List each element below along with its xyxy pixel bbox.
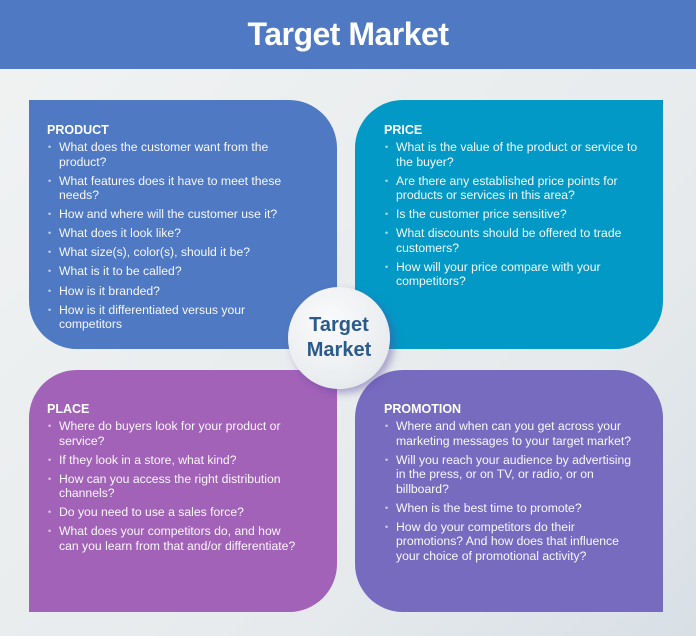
panel: product: What features does it have to meet these needs? — [59, 174, 281, 202]
panel: product: How is it differentiated versus your competitors — [59, 303, 245, 331]
panel: promotion: When is the best time to promote? — [396, 501, 582, 515]
panel: promotion: Where and when can you get across your marketing messages to your target market? — [396, 419, 631, 448]
panel: promotion — [355, 370, 663, 612]
center circle: Target — [309, 314, 369, 336]
panel: product: PRODUCT — [47, 123, 109, 137]
panel: place: Do you need to use a sales force? — [59, 505, 244, 519]
panel: price: Are there any established price points for products or services in this area? — [396, 174, 618, 202]
panel: price: What discounts should be offered to trade customers? — [396, 226, 621, 255]
panel: place: How can you access the right distribution channels? — [59, 472, 281, 500]
panel: product: What does it look like? — [59, 226, 181, 240]
panel: place: What does your competitors do, and how can you learn from that and/or differentiate? — [59, 524, 295, 553]
panel: promotion: Will you reach your audience by advertising in the press, or on TV, or radio, or on billboard? — [396, 453, 631, 496]
panel: product — [29, 100, 337, 349]
panel: place: PLACE — [47, 402, 89, 416]
center circle — [288, 287, 390, 389]
panel: product: What is it to be called? — [59, 264, 182, 278]
panel: place — [29, 370, 337, 612]
panel: product: What size(s), color(s), should it be? — [59, 245, 250, 259]
title: Target Market — [248, 16, 448, 52]
panel: price: What is the value of the product or service to the buyer? — [396, 140, 637, 168]
panel: product: How is it branded? — [59, 284, 160, 298]
panel: product: What does the customer want from the product? — [59, 140, 268, 168]
center circle: Market — [307, 339, 371, 361]
panel: product: How and where will the customer use it? — [59, 207, 277, 221]
title — [0, 0, 696, 69]
panel: promotion: PROMOTION — [384, 402, 461, 416]
panel: promotion: How do your competitors do their promotions? And how does that influence your choice of promotional activity? — [396, 520, 619, 563]
panel: place: If they look in a store, what kind? — [59, 453, 236, 467]
panel: price: How will your price compare with your competitors? — [396, 260, 601, 288]
panel: price — [355, 100, 663, 349]
panel: place: Where do buyers look for your product or service? — [59, 419, 281, 448]
panel: price: PRICE — [384, 123, 422, 137]
panel: price: Is the customer price sensitive? — [396, 207, 567, 221]
